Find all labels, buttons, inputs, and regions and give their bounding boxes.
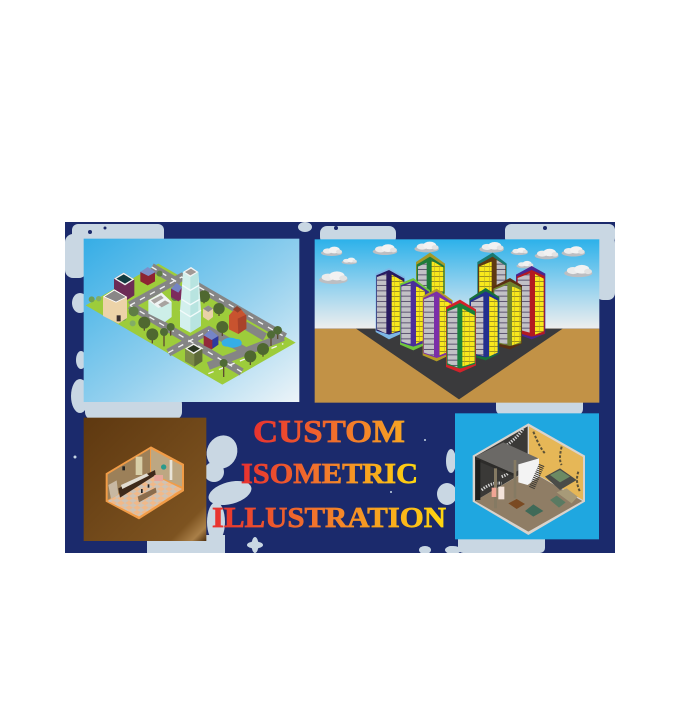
furniture [492, 487, 578, 517]
tower: brown back [477, 253, 507, 299]
building: small blue roof [171, 283, 182, 301]
tower: green red trim [446, 300, 476, 373]
title: custom isometric illustration: ISOMETRIC [241, 458, 418, 490]
panel: brown kitchen room [84, 418, 206, 541]
city ground [86, 264, 296, 385]
staircase [532, 465, 542, 488]
room: left dark wall [475, 426, 528, 501]
room: back left wall [108, 449, 150, 500]
building: purple roof brick [140, 267, 156, 285]
building: twin mint block [148, 293, 172, 322]
tower: blue [469, 288, 499, 360]
building: red brick tower [229, 306, 246, 334]
room: hexagon outline [106, 446, 184, 519]
trees [89, 271, 282, 377]
building: dark purple block [114, 273, 134, 300]
building: cream block [103, 289, 127, 324]
clouds [319, 242, 592, 284]
tower: purple green trim [400, 278, 430, 350]
tower: green back [416, 253, 445, 299]
building: olive block [185, 343, 202, 367]
title: custom isometric illustration: CUSTOM [253, 413, 405, 449]
plaza [356, 329, 563, 399]
building: glass tower [180, 267, 201, 333]
room: floor [108, 474, 182, 517]
panel: blue loft room [455, 413, 599, 539]
mezzanine [475, 442, 539, 508]
kitchen counter [118, 470, 156, 498]
tower: red [516, 266, 545, 339]
road markings [130, 267, 285, 374]
title: custom isometric illustration [212, 413, 446, 534]
building: small cream house [203, 305, 213, 321]
room: hexagon outline [473, 423, 585, 535]
room: floor [475, 470, 582, 532]
infographic canvas [65, 222, 615, 553]
building: blue roof house [204, 330, 218, 349]
title: custom isometric illustration: ILLUSTRATION [212, 502, 446, 534]
room: back right wall [151, 449, 182, 487]
stair mural and wall art [482, 428, 580, 492]
panel: perspective skyscrapers [315, 239, 599, 403]
banner background with flowers [65, 222, 615, 554]
tower: navy [376, 268, 405, 339]
tower: violet gold trim [423, 289, 453, 361]
bed [545, 468, 577, 490]
pond [222, 338, 242, 348]
island and fridge [108, 457, 172, 502]
panel: isometric city [84, 239, 299, 402]
road network [130, 267, 285, 372]
tower: olive [493, 278, 522, 349]
room: right yellow wall [529, 426, 583, 500]
